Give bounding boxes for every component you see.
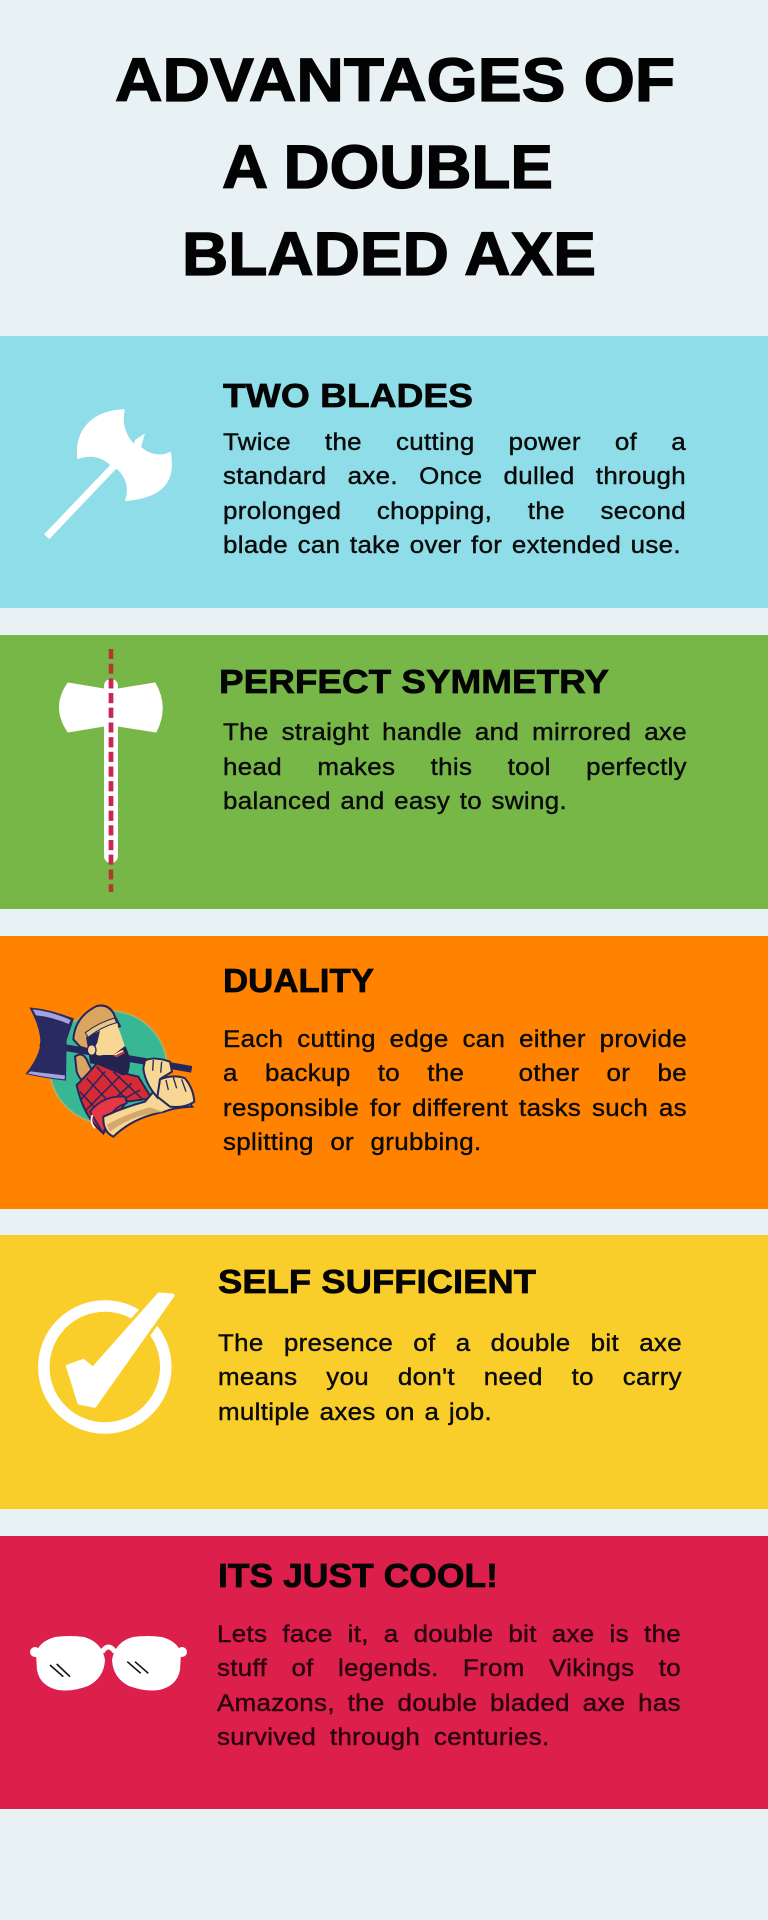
title: A DOUBLE <box>222 133 553 202</box>
text: duality description: Each cutting edge can either provide <box>223 1026 687 1052</box>
ear <box>87 1045 96 1055</box>
face <box>89 1023 129 1058</box>
beard <box>88 1046 130 1075</box>
upper fist <box>143 1059 172 1097</box>
text: perfect symmetry description <box>223 719 687 815</box>
sleeve <box>90 1097 127 1133</box>
heading: self sufficient: SELF SUFFICIENT <box>218 1264 537 1301</box>
text: self sufficient description: multiple axes on a job. <box>218 1398 492 1426</box>
text: perfect symmetry description: The straight handle and mirrored axe <box>223 719 687 746</box>
text: its just cool description: Lets face it, a double bit axe is the <box>217 1620 681 1648</box>
text: self sufficient description <box>218 1330 682 1426</box>
neck fur <box>75 1054 94 1084</box>
text: two blades description: prolonged chopping, the second <box>223 498 686 524</box>
panel: self sufficient <box>0 1235 768 1509</box>
text: self sufficient description: The presence of a double bit axe <box>218 1330 682 1356</box>
icon: check mark in circle <box>38 1292 175 1434</box>
icon: symmetrical axe with dashed centre line <box>59 649 163 892</box>
text: perfect symmetry description: head makes this tool perfectly <box>223 754 687 781</box>
text: two blades description: blade can take over for extended use. <box>223 532 681 559</box>
heading: duality: DUALITY <box>223 963 374 1000</box>
arm <box>103 1086 192 1137</box>
text: self sufficient description: means you don't need to carry <box>218 1364 682 1391</box>
lower fist <box>157 1076 194 1107</box>
panel: its just cool <box>0 1536 768 1809</box>
text: duality description: splitting or grubbing. <box>223 1129 482 1156</box>
text: its just cool description <box>216 1620 681 1751</box>
text: perfect symmetry description: balanced and easy to swing. <box>223 788 567 815</box>
heading: its just cool: ITS JUST COOL! <box>218 1558 498 1595</box>
text: its just cool description: Amazons, the double bladed axe has <box>217 1690 681 1716</box>
heading: perfect symmetry: PERFECT SYMMETRY <box>219 664 609 701</box>
text: two blades description: standard axe. Once dulled through <box>223 463 686 490</box>
fur cap <box>73 1006 120 1050</box>
shirt <box>77 1063 152 1133</box>
headband <box>85 1018 117 1037</box>
title: ADVANTAGES OF <box>115 46 675 115</box>
icon: double bladed axe, tilted <box>44 409 172 539</box>
title <box>115 46 675 289</box>
panel: perfect symmetry <box>0 635 768 909</box>
text: duality description <box>223 1026 687 1156</box>
heading: two blades: TWO BLADES <box>223 378 473 414</box>
icon: lumberjack mascot with axe <box>25 1004 196 1138</box>
title: BLADED AXE <box>182 220 596 289</box>
text: two blades description: Twice the cutting power of a <box>223 428 686 456</box>
text: its just cool description: stuff of legends. From Vikings to <box>217 1655 681 1682</box>
text: duality description: responsible for different tasks such as <box>223 1094 687 1122</box>
mouth <box>113 1049 125 1057</box>
panel: duality <box>0 936 768 1209</box>
text: duality description: a backup to the other or be <box>223 1060 687 1087</box>
text: two blades description <box>223 428 686 559</box>
panel: two blades <box>0 336 768 608</box>
text: its just cool description: survived through centuries. <box>217 1724 550 1751</box>
icon: sunglasses <box>30 1636 187 1690</box>
hair <box>86 1031 100 1050</box>
